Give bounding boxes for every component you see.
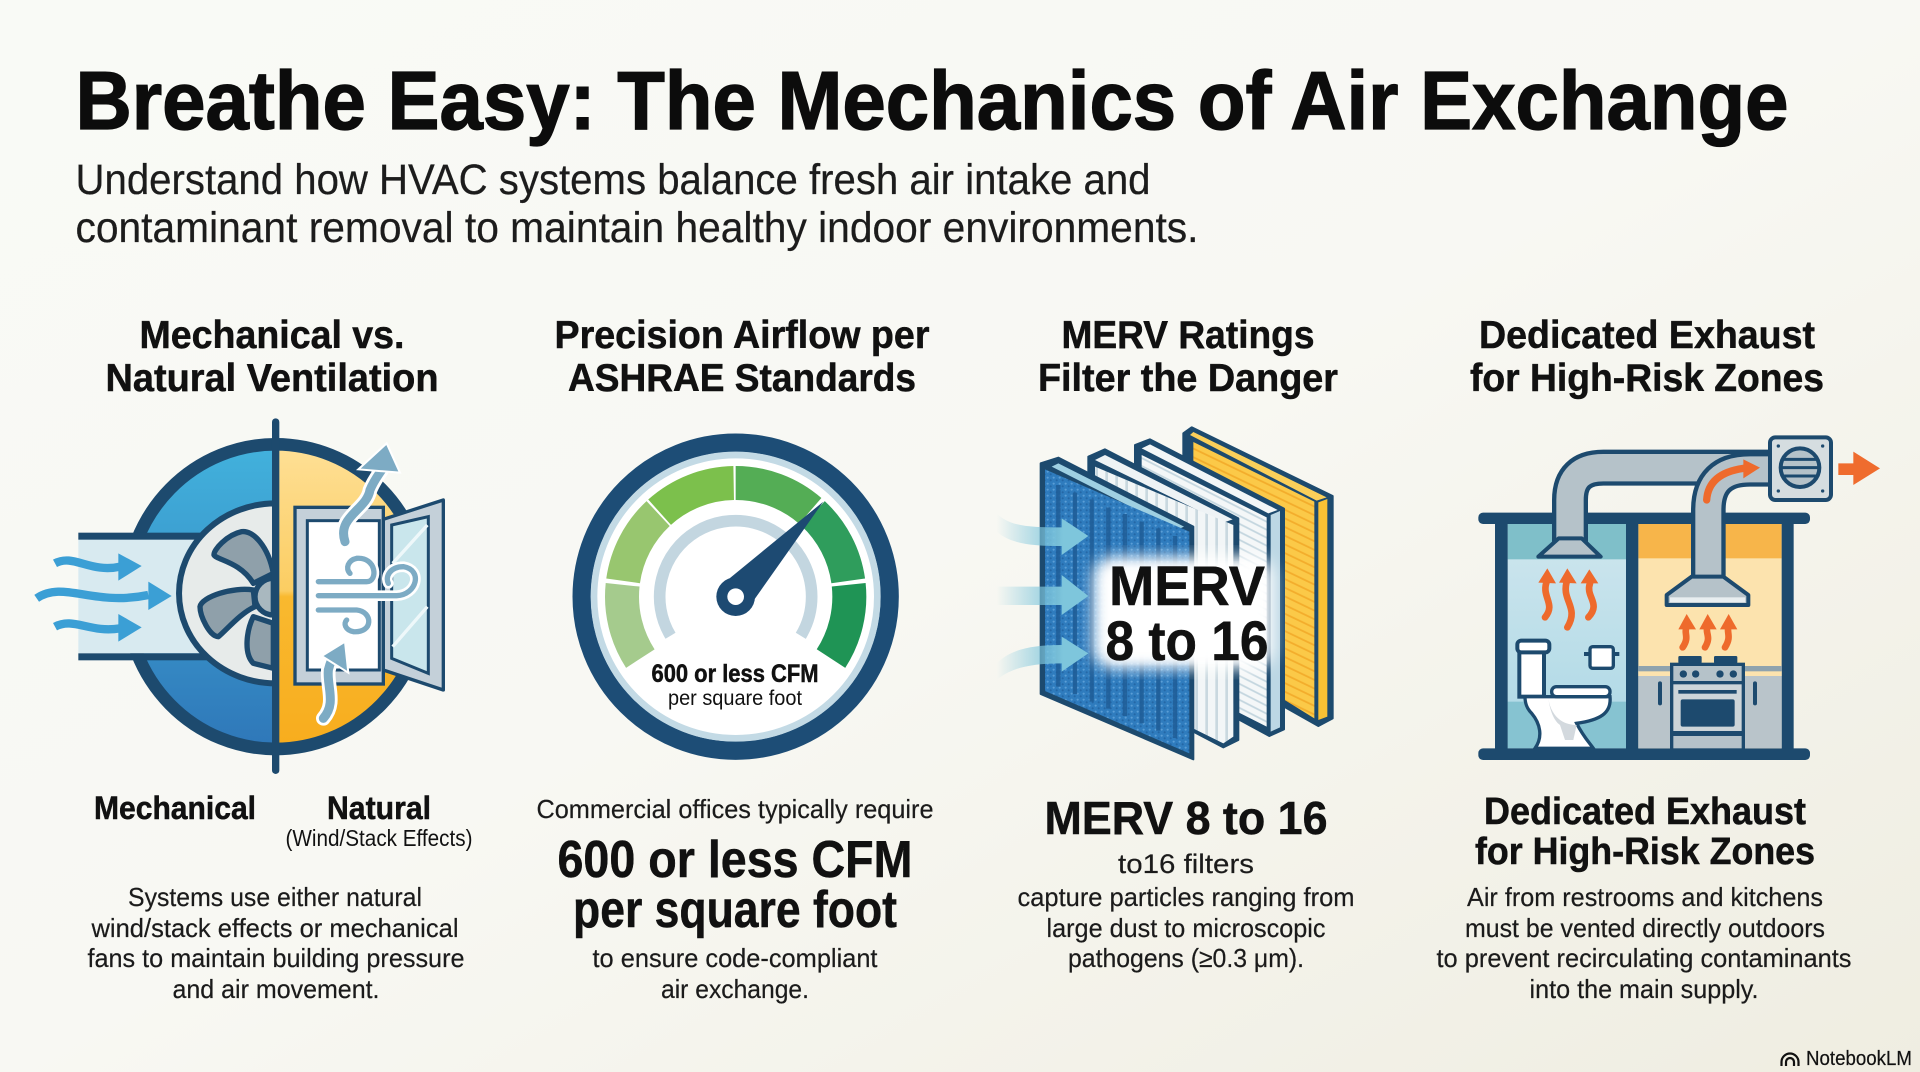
text: MERV description: pathogens (≥0.3 μm). xyxy=(1068,943,1304,973)
text: airflow requirement: 600 or less CFM xyxy=(558,831,912,889)
heading: precision airflow: ASHRAE Standards xyxy=(568,357,916,400)
panel: MERV ratings xyxy=(997,314,1354,973)
icon: layered filters: MERV xyxy=(1109,554,1265,617)
label: natural: (Wind/Stack Effects) xyxy=(286,825,472,851)
text: MERV description xyxy=(1018,792,1354,973)
text: exhaust description: to prevent recirculating contaminants xyxy=(1436,943,1852,973)
heading: MERV ratings xyxy=(1038,314,1338,400)
text: exhaust description: Air from restrooms and kitchens xyxy=(1467,882,1823,912)
chart: airflow gauge: 600 or less CFM xyxy=(652,660,818,688)
subtitle: contaminant removal to maintain healthy indoor environments. xyxy=(76,204,1198,252)
text: exhaust description: must be vented directly outdoors xyxy=(1465,913,1825,943)
text: exhaust description: for High-Risk Zones xyxy=(1475,831,1815,873)
text: MERV description: MERV 8 to 16 xyxy=(1044,792,1328,844)
text: exhaust description: into the main supply. xyxy=(1530,974,1758,1004)
heading: dedicated exhaust: for High-Risk Zones xyxy=(1470,357,1824,400)
text: ventilation description: Systems use either natural xyxy=(128,882,422,912)
label: natural: Natural xyxy=(327,790,431,826)
chart: airflow gauge: per square foot xyxy=(668,687,802,710)
text: MERV description: large dust to microscopic xyxy=(1046,913,1326,943)
text: ventilation description xyxy=(88,882,464,1004)
heading: precision airflow: Precision Airflow per xyxy=(554,314,930,357)
chart: airflow gauge xyxy=(575,436,896,757)
icon: layered filters: 8 to 16 xyxy=(1106,609,1268,672)
icon: fan and open window xyxy=(37,418,443,774)
heading: precision airflow xyxy=(554,314,930,400)
text: MERV description: capture particles ranging from xyxy=(1018,882,1354,912)
panel: precision airflow xyxy=(536,314,934,1004)
text: exhaust description: Dedicated Exhaust xyxy=(1484,791,1806,833)
text: airflow requirement: air exchange. xyxy=(661,974,809,1004)
icon: restroom and kitchen exhaust xyxy=(1478,437,1880,760)
heading: mechanical vs natural xyxy=(106,314,438,400)
heading: dedicated exhaust: Dedicated Exhaust xyxy=(1479,314,1815,357)
text: airflow requirement: per square foot xyxy=(573,881,897,939)
text: ventilation description: wind/stack effects or mechanical xyxy=(91,913,459,943)
panel: dedicated exhaust xyxy=(1436,314,1880,1004)
title: Breathe Easy: The Mechanics of Air Exchange xyxy=(76,54,1788,147)
text: airflow requirement: to ensure code-compliant xyxy=(592,943,878,973)
subtitle: Understand how HVAC systems balance fresh air intake and xyxy=(76,156,1150,204)
text: exhaust description xyxy=(1436,791,1852,1004)
label: natural xyxy=(286,790,472,851)
panel: mechanical vs natural ventilation xyxy=(37,314,472,1004)
NotebookLM badge: NotebookLM xyxy=(1806,1048,1912,1070)
label: mechanical: Mechanical xyxy=(94,790,256,826)
heading: mechanical vs natural: Natural Ventilation xyxy=(106,357,438,400)
text: airflow requirement xyxy=(536,794,934,1004)
text: ventilation description: fans to maintain building pressure xyxy=(88,943,464,973)
text: MERV description: to16 filters xyxy=(1118,849,1254,879)
heading: MERV ratings: Filter the Danger xyxy=(1038,357,1338,400)
subtitle xyxy=(76,156,1198,252)
text: airflow requirement: Commercial offices typically require xyxy=(536,794,934,824)
heading: dedicated exhaust xyxy=(1470,314,1824,400)
icon: layered filters xyxy=(997,427,1333,759)
heading: mechanical vs natural: Mechanical vs. xyxy=(140,314,404,357)
heading: MERV ratings: MERV Ratings xyxy=(1062,314,1314,357)
text: ventilation description: and air movement. xyxy=(172,974,380,1004)
